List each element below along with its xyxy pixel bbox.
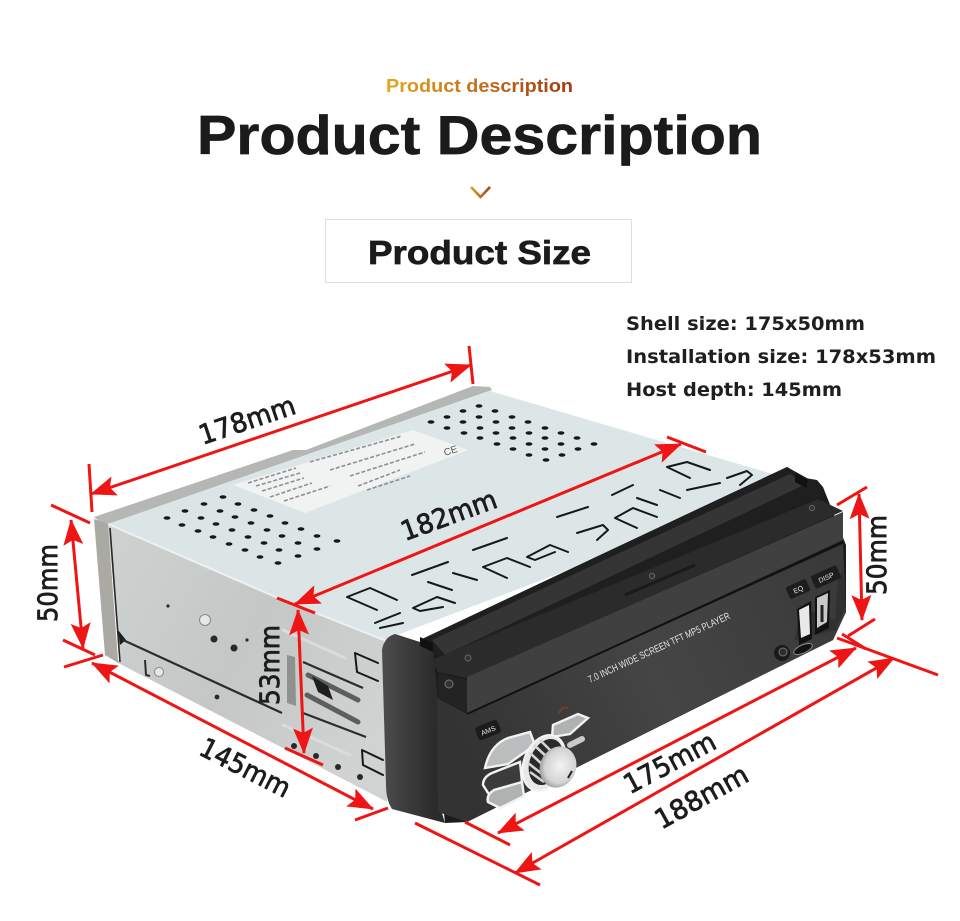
DISP button [810, 565, 842, 589]
size specification text block: Shell size: 175x50mm [626, 313, 865, 335]
dimension: 53mm: 53mm [255, 625, 286, 705]
dimension: right 50mm: 50mm [862, 515, 893, 595]
screw [200, 614, 210, 626]
flip panel [432, 499, 843, 714]
dimension: 178mm [89, 346, 473, 512]
spec sticker: CE [443, 444, 459, 459]
chassis top panel [94, 386, 800, 640]
dimension: 178mm: 178mm [195, 390, 300, 452]
mini USB port [792, 641, 814, 657]
title: Product Description: Product Description [197, 104, 762, 166]
front panel [437, 542, 846, 822]
dimension: 53mm [255, 610, 323, 765]
dimension: 182mm: 182mm [397, 484, 501, 548]
chassis side panel [94, 519, 387, 802]
dimension: left 50mm: 50mm [33, 544, 64, 622]
stamped slots on top panel [347, 462, 752, 628]
AMS button [474, 719, 502, 741]
dimension: 188mm: 188mm [650, 759, 754, 836]
lower rail [123, 640, 366, 737]
AMS button: AMS [480, 725, 497, 737]
mounting holes [166, 604, 363, 780]
control buttons [483, 714, 588, 808]
ventilation holes, front group [428, 404, 597, 462]
DISP button: DISP [818, 572, 836, 585]
dimension: 175mm [465, 634, 866, 845]
front end cap [382, 634, 445, 823]
section heading: Product Size: Product Size [368, 234, 591, 271]
size specification text block [626, 313, 936, 401]
car stereo product illustration [94, 386, 846, 823]
dimension: 188mm [415, 638, 938, 885]
front panel model text: 7.0 INCH WIDE SCREEN TFT MP5 PLAYER [587, 611, 732, 686]
AUX jack [774, 645, 790, 661]
icon: chevron down [471, 187, 490, 197]
rear flange [94, 519, 120, 664]
size specification text block: Host depth: 145mm [626, 379, 842, 401]
ventilation holes, rear group [164, 495, 340, 565]
EQ button: EQ [793, 585, 805, 596]
lid ridge [420, 467, 823, 660]
section heading: Product Size [326, 220, 632, 282]
USB ports [797, 590, 830, 645]
dark body backing behind the front [420, 467, 846, 823]
small heading: Product description: Product description [386, 76, 573, 96]
dimension: right 50mm [837, 487, 893, 636]
rear flange top strip [94, 386, 492, 524]
EQ button [785, 579, 811, 599]
dimension: 145mm: 145mm [194, 732, 296, 804]
size specification text block: Installation size: 178x53mm [626, 346, 936, 368]
window and slots [287, 655, 296, 706]
dimension: 175mm: 175mm [619, 726, 721, 801]
dimension: left 50mm [33, 505, 95, 655]
inner dark control strip [795, 570, 846, 640]
volume knob [515, 729, 583, 797]
dimension: 145mm [64, 655, 388, 820]
dimension: 182mm [277, 437, 706, 613]
spec sticker [233, 430, 468, 513]
